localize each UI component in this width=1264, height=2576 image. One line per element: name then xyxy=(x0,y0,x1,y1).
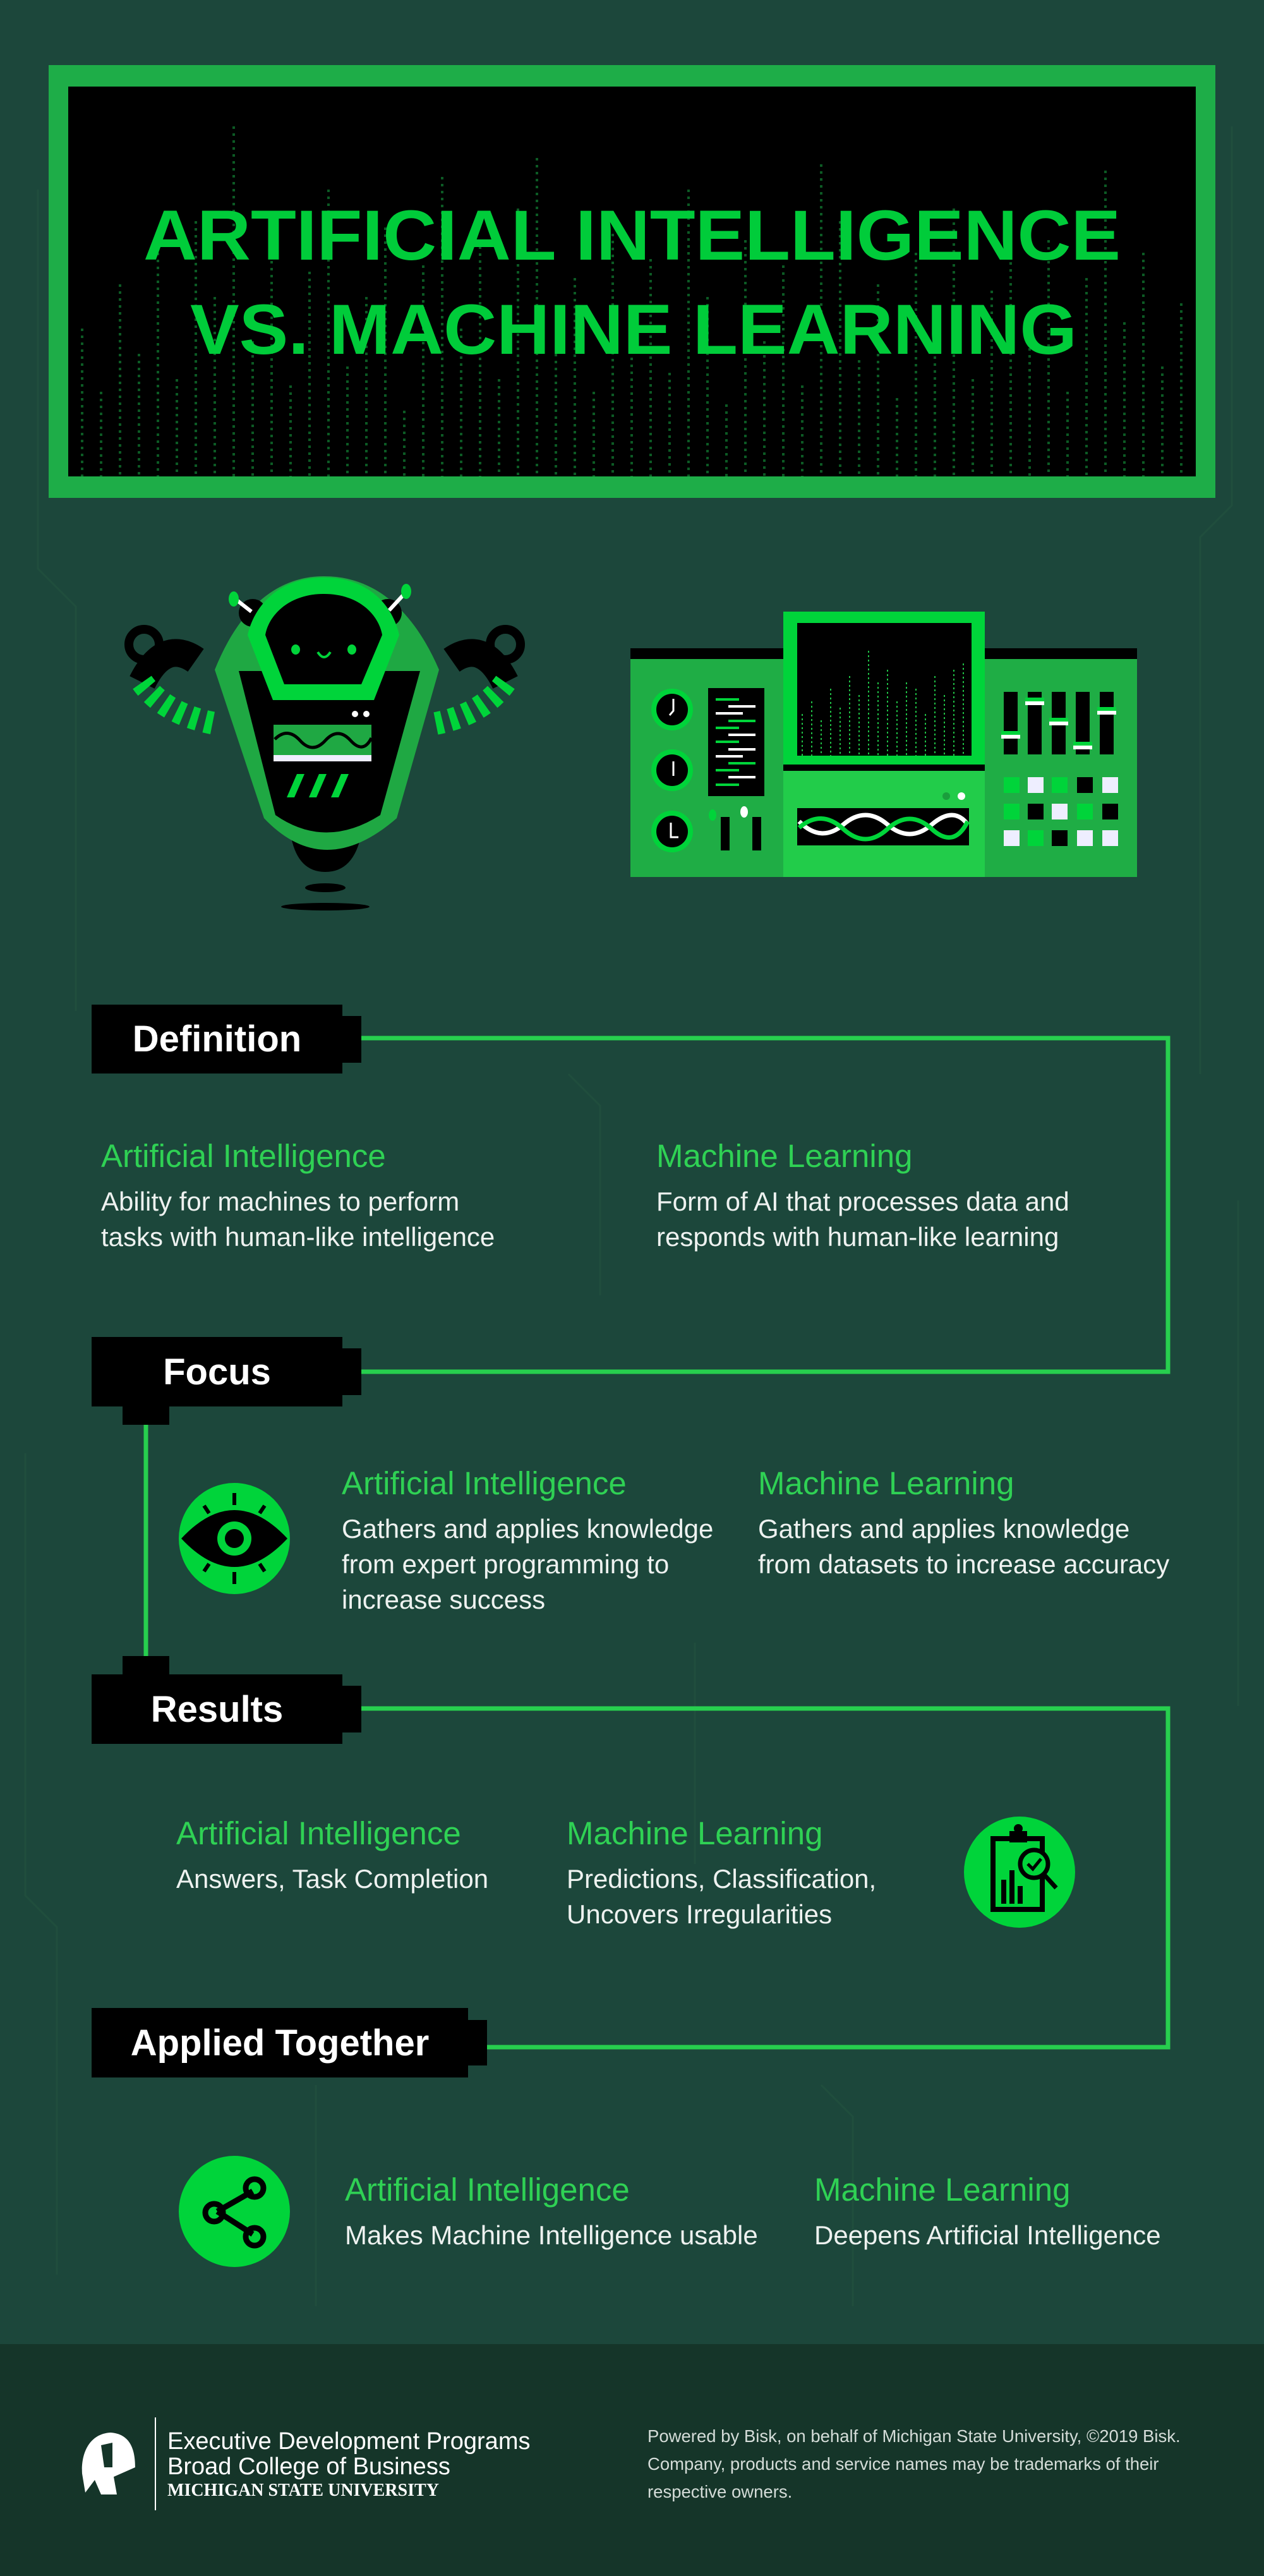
title text: ARTIFICIAL INTELLIGENCE xyxy=(143,196,1121,275)
text: applied AI: Artificial Intelligence xyxy=(345,2172,630,2208)
text: definition ML: responds with human-like learning xyxy=(656,1222,1059,1252)
footer: disclaimer: Powered by Bisk, on behalf of Michigan State University, ©2019 Bisk. xyxy=(647,2426,1181,2446)
machine illustration xyxy=(630,612,1137,877)
robot illustration xyxy=(129,576,521,910)
text: definition AI xyxy=(101,1138,495,1252)
footer: disclaimer xyxy=(647,2426,1181,2501)
text: results AI: Answers, Task Completion xyxy=(176,1864,488,1894)
text: focus AI: increase success xyxy=(342,1585,545,1614)
connector lines xyxy=(146,1038,1168,2047)
text: focus AI xyxy=(342,1465,713,1614)
title text xyxy=(143,196,1121,369)
label: Focus: Focus xyxy=(163,1351,271,1393)
text: results ML: Uncovers Irregularities xyxy=(567,1899,832,1929)
text: focus AI: from expert programming to xyxy=(342,1549,669,1579)
text: definition ML: Machine Learning xyxy=(656,1138,912,1174)
footer band xyxy=(0,2344,1264,2576)
text: focus ML: Gathers and applies knowledge xyxy=(758,1514,1129,1544)
label: Focus xyxy=(92,1337,361,1425)
text: focus ML xyxy=(758,1465,1170,1579)
icon: results clipboard xyxy=(964,1817,1075,1928)
footer: disclaimer: respective owners. xyxy=(647,2482,792,2501)
icon: spartan helmet xyxy=(82,2433,135,2494)
label: Results xyxy=(92,1656,361,1744)
text: applied AI: Makes Machine Intelligence usable xyxy=(345,2220,758,2250)
text: results ML xyxy=(567,1815,876,1929)
text: applied ML xyxy=(814,2172,1161,2250)
text: applied ML: Deepens Artificial Intelligence xyxy=(814,2220,1161,2250)
footer: MSU logo text: Executive Development Programs xyxy=(167,2428,530,2455)
text: definition AI: tasks with human-like intelligence xyxy=(101,1222,495,1252)
footer: MSU logo text: Broad College of Business xyxy=(167,2453,450,2480)
label: Applied Together: Applied Together xyxy=(131,2022,429,2064)
label: Applied Together xyxy=(92,2008,487,2077)
label: Definition xyxy=(92,1005,361,1073)
footer: MSU logo text xyxy=(155,2417,546,2510)
text: results AI: Artificial Intelligence xyxy=(176,1815,461,1851)
title text: VS. MACHINE LEARNING xyxy=(190,290,1077,369)
text: focus ML: from datasets to increase accuracy xyxy=(758,1549,1169,1579)
text: results ML: Predictions, Classification, xyxy=(567,1864,876,1894)
text: results AI xyxy=(176,1815,488,1894)
title frame xyxy=(49,65,1215,498)
text: definition AI: Ability for machines to perform xyxy=(101,1187,459,1216)
text: definition ML: Form of AI that processes data and xyxy=(656,1187,1069,1216)
icon: eye xyxy=(179,1483,290,1594)
label: Results: Results xyxy=(151,1688,283,1730)
text: definition ML xyxy=(656,1138,1069,1252)
icon: share xyxy=(179,2156,290,2267)
text: definition AI: Artificial Intelligence xyxy=(101,1138,386,1174)
text: focus ML: Machine Learning xyxy=(758,1465,1014,1501)
text: focus AI: Artificial Intelligence xyxy=(342,1465,627,1501)
footer: disclaimer: Company, products and service names may be trademarks of their xyxy=(647,2454,1159,2474)
text: results ML: Machine Learning xyxy=(567,1815,822,1851)
text: applied ML: Machine Learning xyxy=(814,2172,1070,2208)
label: Definition: Definition xyxy=(133,1019,301,1060)
text: applied AI xyxy=(345,2172,758,2250)
footer: MSU logo text: MICHIGAN STATE UNIVERSITY xyxy=(167,2481,439,2500)
text: focus AI: Gathers and applies knowledge xyxy=(342,1514,713,1544)
